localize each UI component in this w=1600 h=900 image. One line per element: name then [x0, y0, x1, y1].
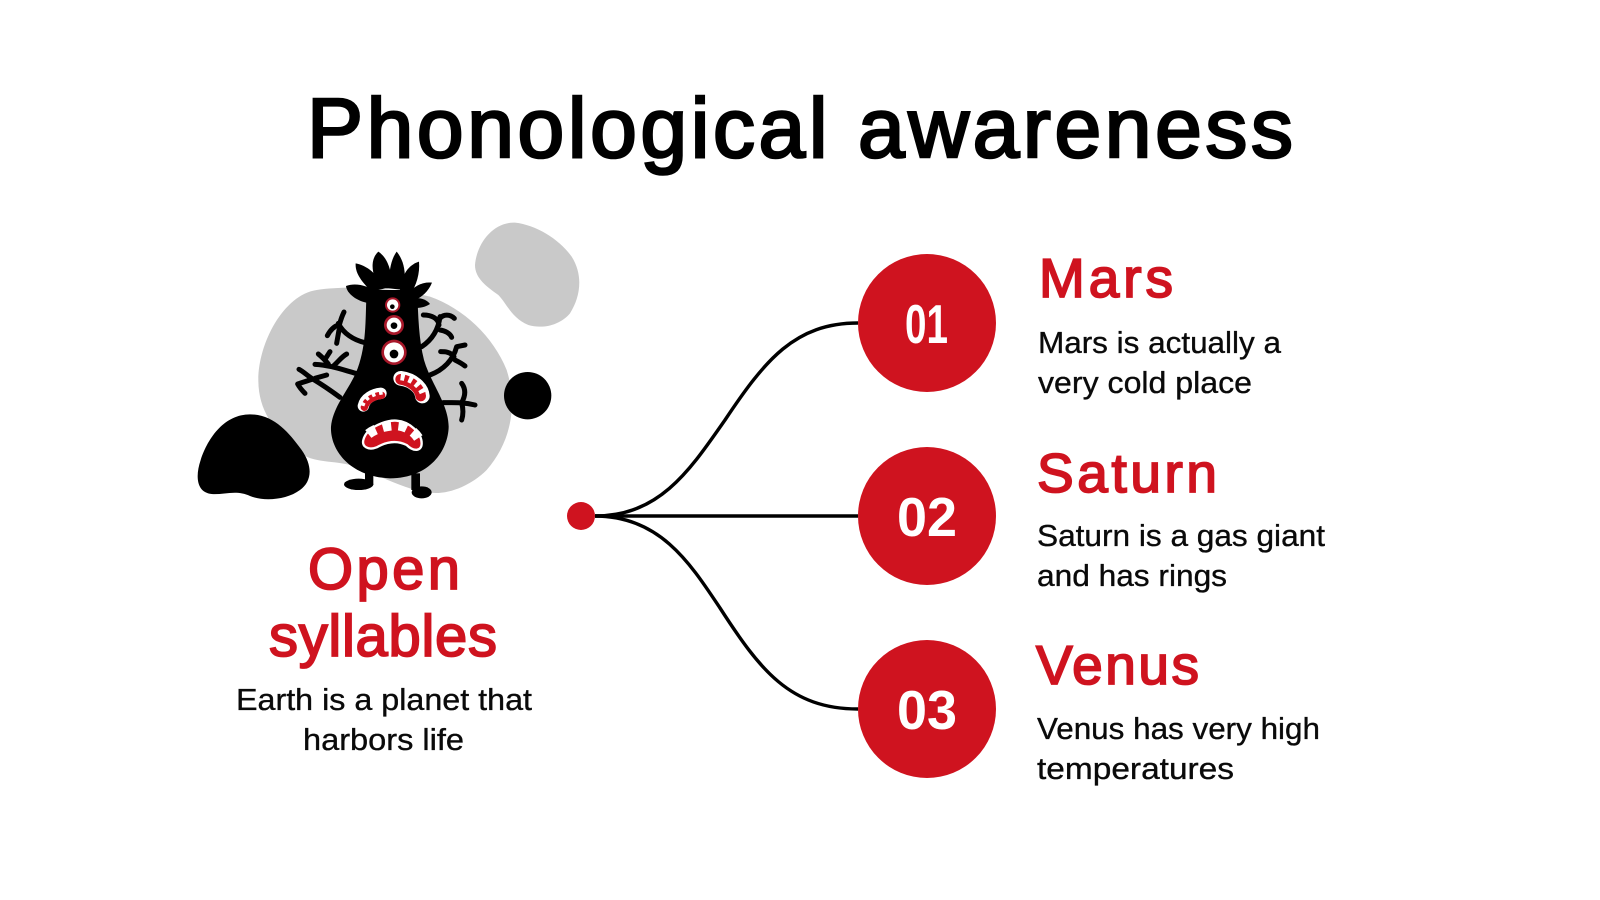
text: earth: [236, 682, 532, 757]
number badge 01: 01: [905, 293, 948, 355]
blob: small gray: [475, 223, 579, 327]
text: earth: Earth is a planet that: [236, 682, 532, 717]
number badge 02: [858, 447, 996, 585]
monster body: [331, 290, 449, 478]
illustration: monster with blobs: [198, 223, 579, 499]
text: Mars: [1038, 325, 1282, 400]
heading: Saturn: Saturn: [1037, 442, 1217, 504]
blob: black circle: [504, 372, 551, 419]
text: Venus: Venus has very high: [1037, 711, 1320, 746]
text: Venus: [1037, 711, 1320, 786]
text: Saturn: Saturn is a gas giant: [1037, 518, 1325, 553]
text: Mars: very cold place: [1038, 365, 1252, 400]
text: Venus: temperatures: [1037, 751, 1234, 786]
heading: open syllables: Open: [308, 537, 460, 602]
blob: large gray: [258, 288, 512, 493]
monster eyes: [381, 297, 407, 365]
text: Saturn: [1037, 518, 1325, 593]
number badge 01: [858, 254, 996, 392]
item 01: Mars: [858, 247, 1282, 400]
blob: black: [198, 414, 310, 499]
monster: [298, 252, 475, 498]
heading: Mars: Mars: [1039, 247, 1173, 309]
connector lines: [595, 323, 858, 709]
monster arms: [298, 312, 475, 420]
heading: open syllables: [269, 537, 497, 669]
text: Mars: Mars is actually a: [1038, 325, 1282, 360]
number badge 03: 03: [897, 679, 957, 741]
text: earth: harbors life: [303, 722, 464, 757]
left block: [236, 537, 532, 757]
monster brow: left: [362, 392, 383, 407]
heading: open syllables: syllables: [269, 604, 497, 669]
item 03: Venus: [858, 634, 1320, 786]
number badge 03: [858, 640, 996, 778]
monster brow: right: [401, 377, 424, 397]
heading: Venus: Venus: [1036, 634, 1199, 696]
title: Phonological awareness: [307, 81, 1293, 175]
origin dot: [567, 502, 595, 530]
text: Saturn: and has rings: [1037, 558, 1227, 593]
monster hair: [346, 252, 432, 308]
monster mouth: [363, 421, 422, 450]
number badge 02: 02: [897, 486, 957, 548]
monster feet and legs: [344, 472, 432, 498]
item 02: Saturn: [858, 442, 1325, 593]
